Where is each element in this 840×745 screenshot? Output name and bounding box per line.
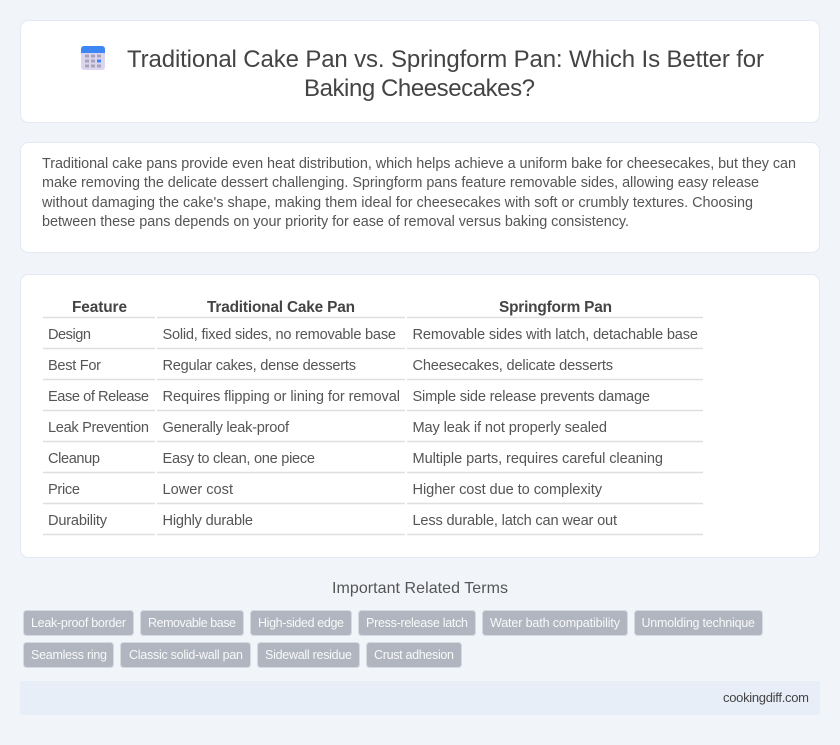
tag: classic solid-wall pan: Classic solid-wall pan [129, 648, 243, 662]
row: best for: Regular cakes, dense desserts [162, 358, 356, 374]
tag: unmolding technique: Unmolding technique [642, 616, 755, 630]
tag: crust adhesion [366, 642, 462, 668]
tag group: related terms [24, 610, 762, 668]
text block: introduction [41, 156, 796, 230]
row: cleanup: Easy to clean, one piece [162, 451, 315, 467]
text block: introduction: without damaging the cake's shape, making them ideal for cheesecakes with soft or crumbly textures. Choosing [41, 195, 753, 211]
table header row: Feature [72, 299, 127, 316]
table header row: Traditional Cake Pan [207, 299, 355, 316]
title [127, 46, 764, 102]
title: Traditional Cake Pan vs. Springform Pan: Which Is Better for [127, 46, 764, 73]
tag: high-sided edge [250, 610, 352, 636]
table header row: Springform Pan [499, 299, 612, 316]
row: leak prevention [48, 420, 607, 436]
text block: introduction: Traditional cake pans provide even heat distribution, which helps achieve a uniform bake for cheesecakes, but they can [42, 156, 796, 172]
tag: water bath compatibility: Water bath compatibility [490, 616, 621, 630]
panel: title header [20, 20, 820, 122]
row: ease of release [48, 389, 650, 405]
row: cleanup: Multiple parts, requires careful cleaning [412, 451, 663, 467]
row: cleanup: Cleanup [48, 451, 100, 467]
row: best for: Best For [48, 358, 101, 374]
text block: introduction: between these pans depends on your priority for ease of removal versus baking consistency. [42, 214, 629, 230]
row: durability: Durability [48, 513, 108, 529]
row: price: Lower cost [162, 482, 233, 498]
row: price: Higher cost due to complexity [412, 482, 603, 498]
tag: removable base: Removable base [148, 616, 236, 630]
row: design [48, 327, 698, 343]
tag: sidewall residue [258, 642, 360, 668]
panel: comparison table [20, 274, 820, 558]
row: design: Solid, fixed sides, no removable base [162, 327, 396, 343]
tag: leak-proof border: Leak-proof border [31, 616, 126, 630]
tag: press-release latch [358, 610, 476, 636]
footer: cookingdiff.com [723, 690, 809, 705]
row: leak prevention: Leak Prevention [48, 420, 149, 436]
tag: seamless ring [24, 642, 114, 668]
footer [20, 681, 820, 715]
row: best for [48, 358, 613, 374]
tag: water bath compatibility [482, 610, 628, 636]
row: price: Price [48, 482, 80, 498]
row: design: Removable sides with latch, detachable base [412, 327, 698, 343]
tag: high-sided edge: High-sided edge [258, 616, 344, 630]
text block: introduction: make removing the delicate dessert challenging. Springform pans feature removable sides, allowing easy release [42, 175, 759, 191]
row: cleanup [48, 451, 663, 467]
tag: leak-proof border [24, 610, 134, 636]
row: price [48, 482, 603, 498]
heading: related terms: Important Related Terms [332, 580, 508, 597]
row: best for: Cheesecakes, delicate desserts [412, 358, 613, 374]
row: ease of release: Ease of Release [48, 389, 149, 405]
row: durability: Highly durable [162, 513, 253, 529]
icon: calendar [81, 46, 105, 70]
row: durability [48, 513, 617, 529]
title: Baking Cheesecakes? [304, 75, 535, 102]
tag: removable base [140, 610, 244, 636]
row: leak prevention: Generally leak-proof [162, 420, 290, 436]
row: durability: Less durable, latch can wear out [412, 513, 617, 529]
tag: press-release latch: Press-release latch [366, 616, 468, 630]
tag: classic solid-wall pan [120, 642, 250, 668]
row: design: Design [48, 327, 91, 343]
tag: sidewall residue: Sidewall residue [265, 648, 352, 662]
row: ease of release: Simple side release prevents damage [412, 389, 650, 405]
table header row [72, 299, 612, 316]
row: leak prevention: May leak if not properly sealed [412, 420, 607, 436]
tag: crust adhesion: Crust adhesion [374, 648, 454, 662]
tag: unmolding technique [634, 610, 762, 636]
tag: seamless ring: Seamless ring [31, 648, 107, 662]
row: ease of release: Requires flipping or lining for removal [162, 389, 400, 405]
panel: introduction text [20, 142, 820, 252]
